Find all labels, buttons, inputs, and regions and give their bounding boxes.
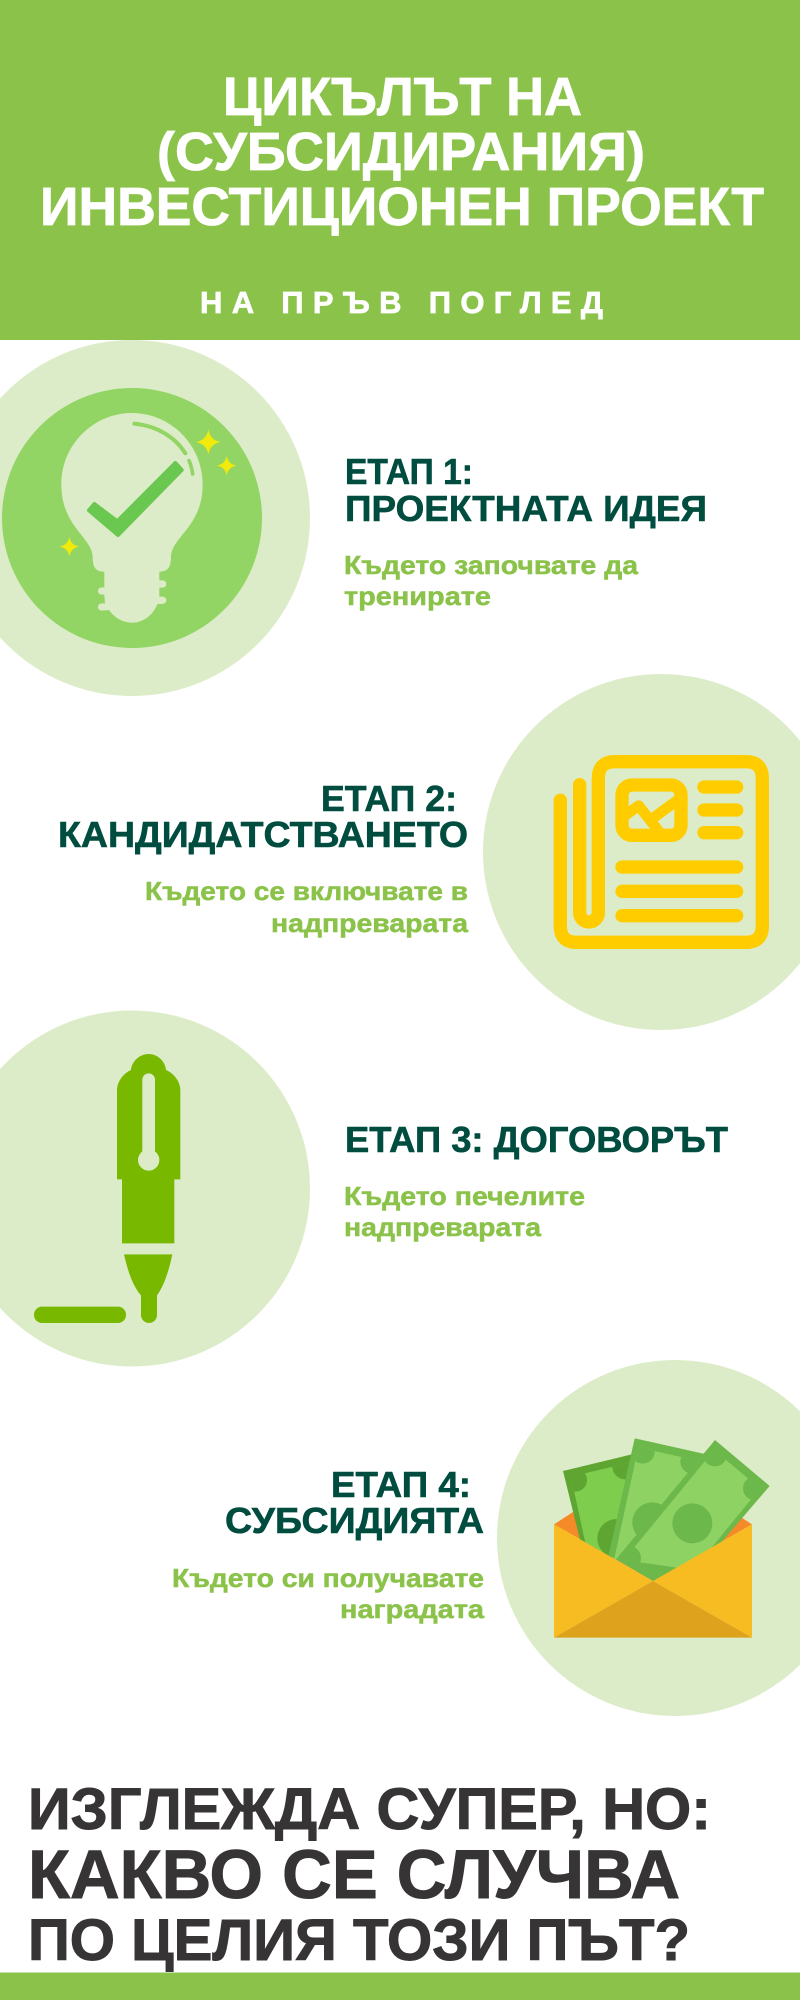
- text block: stage 3: надпреварата: [344, 1212, 542, 1242]
- text block: stage 2: Където се включвате в: [145, 876, 468, 906]
- text block: stage 4: наградата: [340, 1594, 485, 1624]
- text block: stage 1: ЕТАП 1:: [345, 451, 473, 492]
- title: (СУБСИДИРАНИЯ): [157, 122, 645, 182]
- footer band: [0, 1972, 800, 2000]
- closing question heading: ИЗГЛЕЖДА СУПЕР, НО:: [28, 1777, 711, 1842]
- text block: stage 3: [344, 1119, 728, 1242]
- panel: header: [0, 0, 800, 340]
- title: ЦИКЪЛЪТ НА: [223, 67, 582, 127]
- text block: stage 4: [172, 1464, 485, 1624]
- text block: stage 4: ЕТАП 4:: [331, 1464, 471, 1505]
- closing question heading: КАКВО СЕ СЛУЧВА: [28, 1836, 680, 1913]
- text block: stage 2: КАНДИДАТСТВАНЕТО: [58, 814, 468, 855]
- panel: stage 3 icon, pen: [0, 1010, 310, 1366]
- text block: stage 1: [344, 451, 707, 611]
- panel: stage 4 icon, envelope with money: [497, 1360, 800, 1716]
- title: [40, 67, 764, 237]
- text block: stage 4: Където си получавате: [172, 1563, 484, 1593]
- subtitle: НА ПРЪВ ПОГЛЕД: [200, 285, 603, 320]
- text block: stage 4: СУБСИДИЯТА: [225, 1500, 484, 1541]
- text block: stage 2: [58, 778, 469, 938]
- text block: stage 1: ПРОЕКТНАТА ИДЕЯ: [345, 488, 707, 529]
- text block: stage 3: Където печелите: [344, 1181, 585, 1211]
- title: ИНВЕСТИЦИОНЕН ПРОЕКТ: [40, 177, 764, 237]
- closing question heading: ПО ЦЕЛИЯ ТОЗИ ПЪТ?: [28, 1908, 690, 1973]
- text block: stage 3: ЕТАП 3: ДОГОВОРЪТ: [345, 1119, 728, 1160]
- panel: stage 2 icon, newspaper: [483, 674, 800, 1030]
- closing question heading: [28, 1777, 711, 1973]
- text block: stage 2: ЕТАП 2:: [321, 778, 457, 819]
- panel: stage 1 icon, light bulb with check mark: [0, 340, 310, 696]
- text block: stage 2: надпреварата: [271, 908, 469, 938]
- text block: stage 1: тренирате: [344, 581, 491, 611]
- text block: stage 1: Където започвате да: [344, 550, 639, 580]
